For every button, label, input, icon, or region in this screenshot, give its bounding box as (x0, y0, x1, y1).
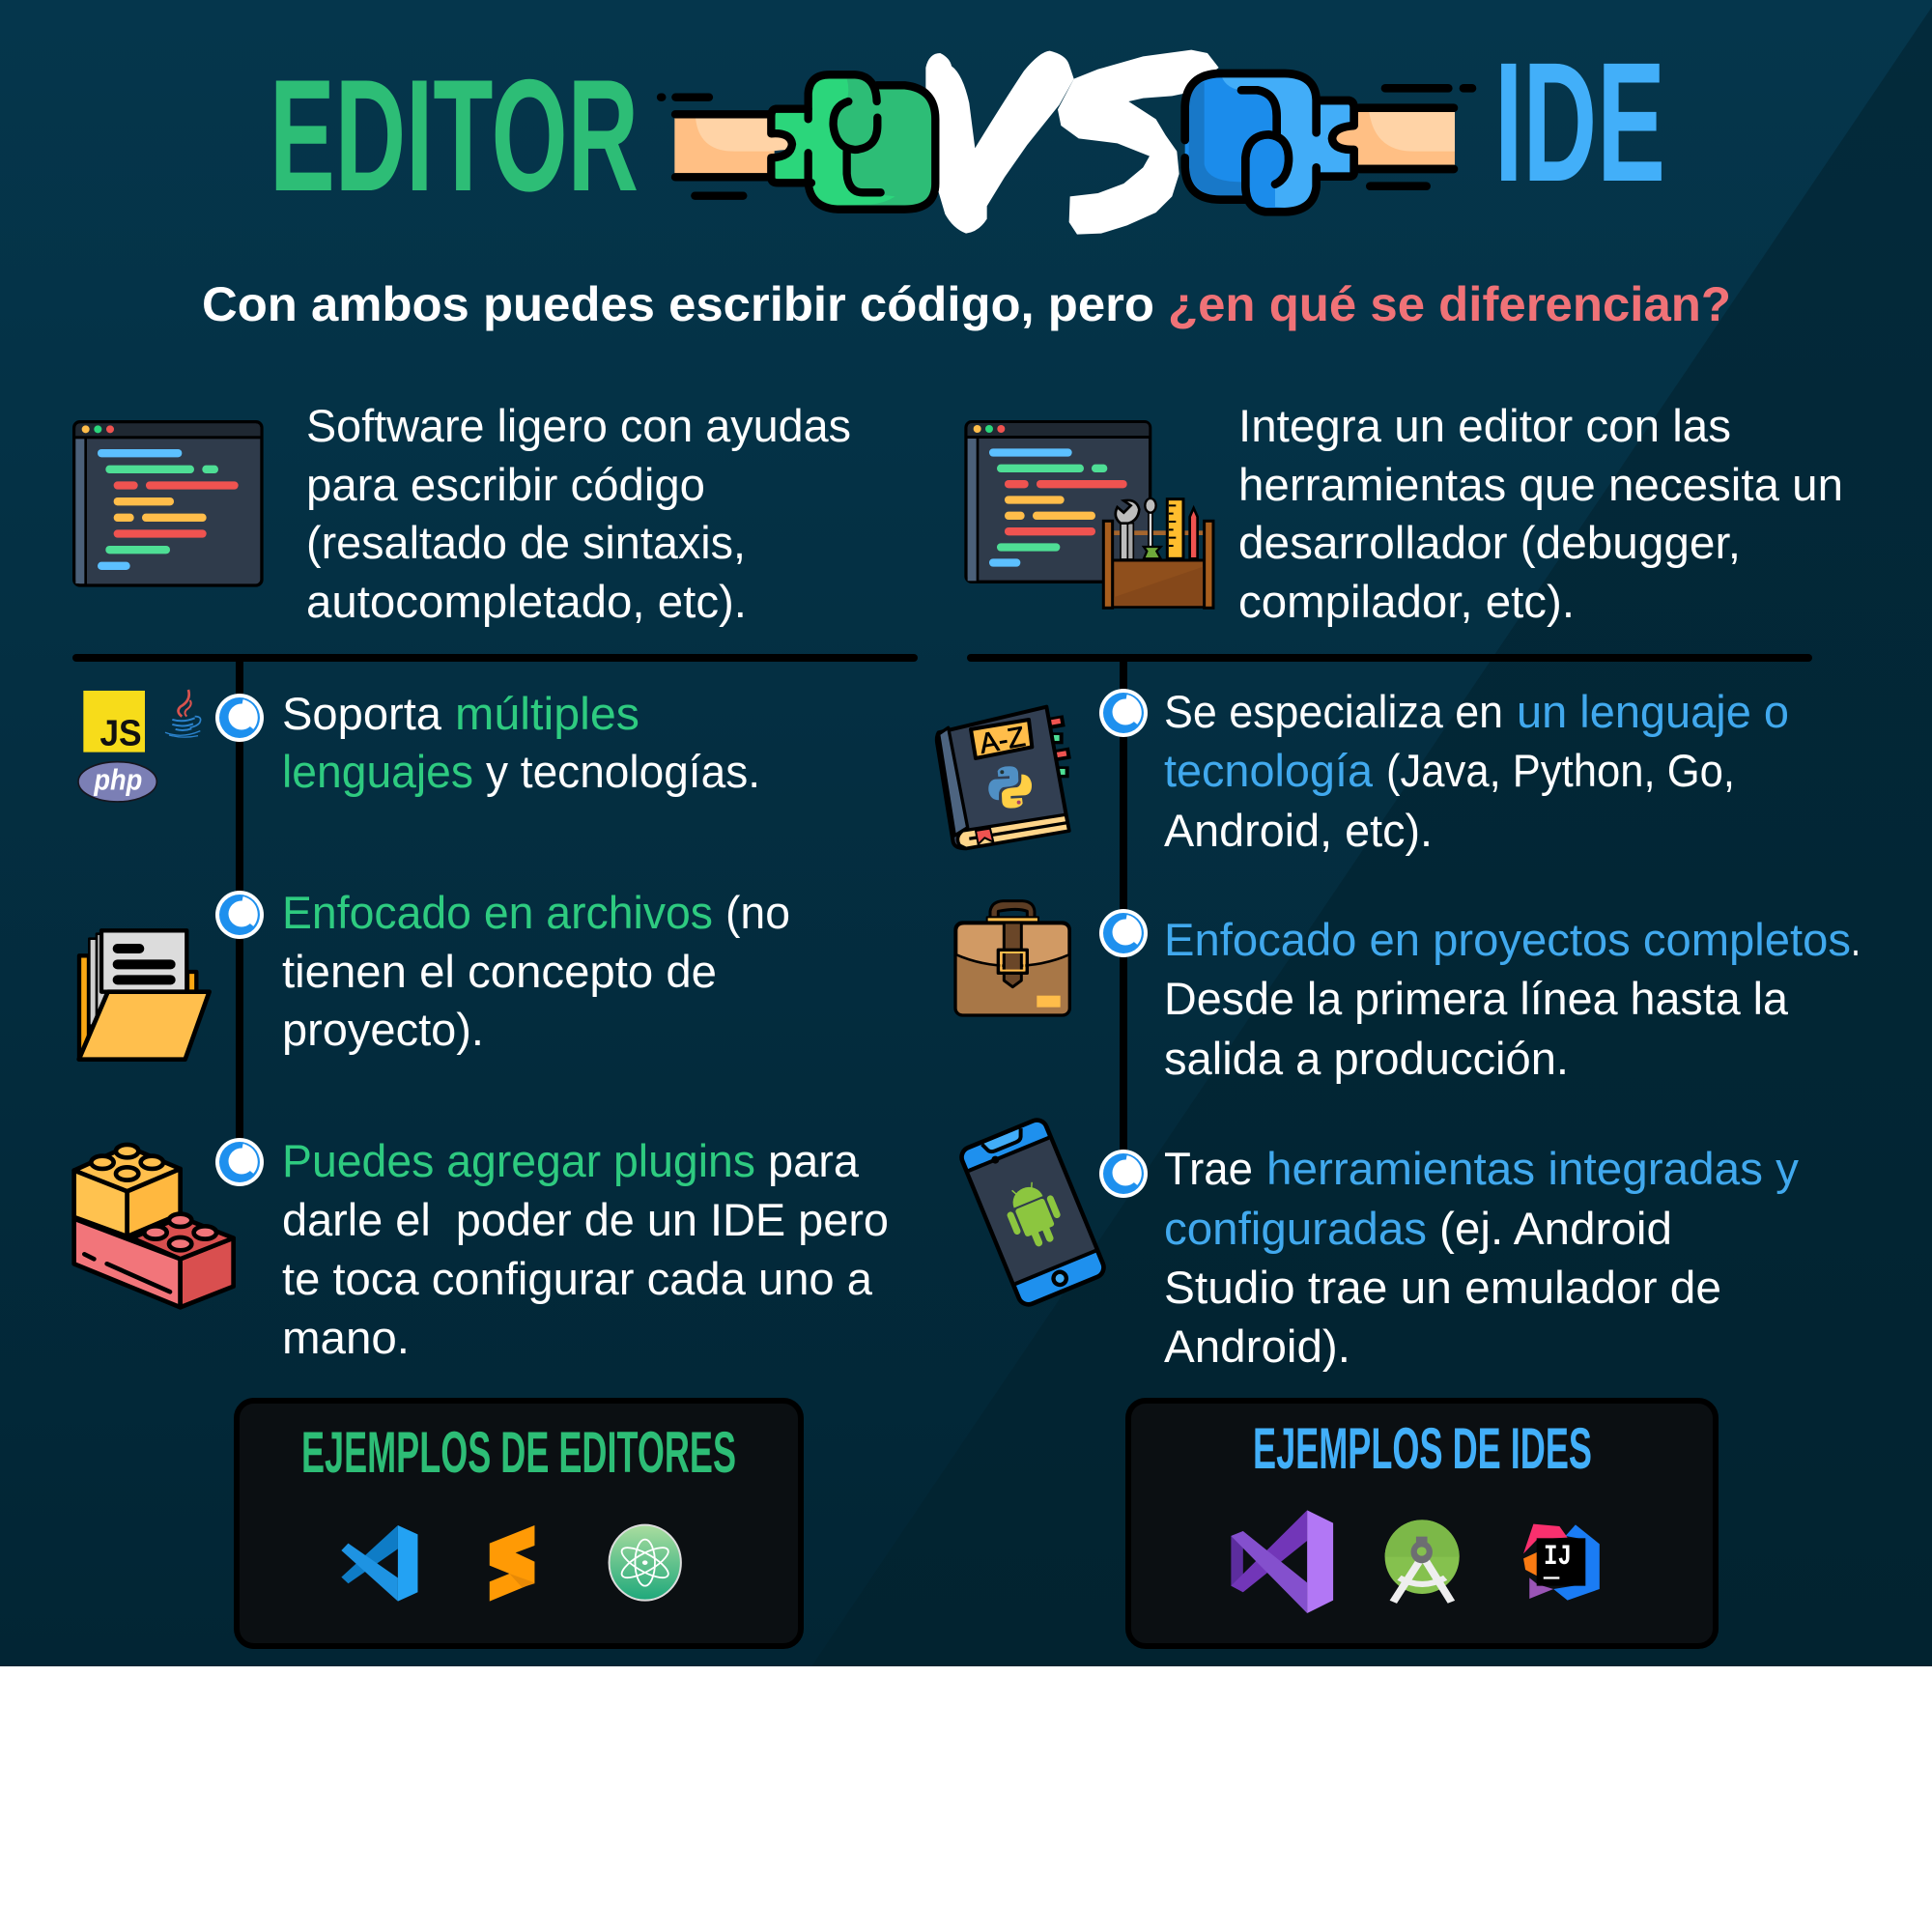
text: bullet 3 editor (282, 1135, 889, 1363)
text: bullet 2 IDE (1164, 914, 1861, 1084)
icon: Atom (610, 1525, 681, 1601)
icon: blue boxing glove fist (1185, 73, 1472, 212)
text: bullet 1 editor: Soporta (282, 688, 442, 739)
text: IDE description: Integra un editor con las (1238, 400, 1731, 451)
icon: android phone (958, 1117, 1107, 1308)
text: editor description: (resaltado de sintaxis, (306, 517, 746, 568)
text: bullet 3 editor: darle el poder de un IDE pero (282, 1194, 889, 1245)
text: bullet 1 editor (282, 688, 760, 797)
text: bullet 3 IDE: Android). (1164, 1321, 1350, 1372)
icon: timeline marker (215, 694, 264, 742)
icon: PHP: php (93, 763, 142, 796)
text: bullet 1 IDE: (Java, Python, Go, (1386, 745, 1735, 796)
text: editor description: autocompletado, etc). (306, 576, 747, 627)
icon: IntelliJ IDEA (1523, 1524, 1600, 1601)
text: editor description (306, 400, 851, 627)
text: bullet 3 editor: Puedes agregar plugins (282, 1135, 755, 1186)
text: bullet 1 IDE: un lenguaje o (1517, 686, 1789, 737)
icon: Visual Studio (1231, 1510, 1333, 1613)
text: bullet 3 IDE (1164, 1143, 1799, 1372)
icon: briefcase (955, 901, 1069, 1015)
icon: timeline marker (215, 891, 264, 939)
text: bullet 3 IDE: Studio trae un emulador de (1164, 1262, 1721, 1313)
text: bullet 2 editor: Enfocado en archivos (282, 887, 713, 938)
text: bullet 2 IDE: salida a producción. (1164, 1033, 1569, 1084)
icon: timeline marker (1099, 689, 1148, 737)
icon: Android Studio (1385, 1520, 1460, 1602)
heading: IDE examples: EJEMPLOS DE IDES (1253, 1416, 1592, 1481)
icon: Java (165, 690, 201, 737)
text: bullet 2 IDE: Enfocado en proyectos completos (1164, 914, 1851, 965)
icon: IDE code window with toolbox (966, 422, 1213, 608)
text: bullet 2 editor: (no (725, 887, 790, 938)
text: bullet 2 IDE: . (1851, 914, 1861, 965)
text: bullet 2 editor: tienen el concepto de (282, 946, 717, 997)
icon: green boxing glove fist (661, 74, 935, 210)
text: editor description: Software ligero con ayudas (306, 400, 851, 451)
text: bullet 3 IDE: configuradas (1164, 1203, 1427, 1254)
icon: A-Z python book: A-Z (977, 721, 1028, 760)
title: VS brush lettering (925, 50, 1219, 235)
text: bullet 2 editor (282, 887, 790, 1055)
text: bullet 1 IDE: Se especializa en (1164, 686, 1503, 737)
title: EDITOR: EDITOR (270, 46, 639, 224)
panel: editor examples (237, 1401, 801, 1646)
timeline: editor (72, 654, 918, 1162)
subtitle (202, 277, 1731, 331)
subtitle: Con ambos puedes escribir código, pero (202, 277, 1154, 331)
text: bullet 3 IDE: (ej. Android (1439, 1203, 1672, 1254)
text: bullet 3 editor: mano. (282, 1312, 410, 1363)
icon: folder with files (79, 930, 210, 1060)
icon: timeline marker (1099, 909, 1148, 957)
text: bullet 3 editor: para (768, 1135, 860, 1186)
icon: lego bricks (74, 1145, 234, 1307)
title: IDE: IDE (1494, 28, 1665, 217)
subtitle: ¿en qué se diferencian? (1168, 277, 1731, 331)
icon: Sublime Text (490, 1525, 534, 1602)
text: bullet 1 IDE: Android, etc). (1164, 805, 1433, 856)
text: bullet 3 IDE: herramientas integradas y (1266, 1143, 1799, 1194)
text: bullet 2 IDE: Desde la primera línea hasta la (1164, 973, 1789, 1024)
icon: JS, Java and PHP logos (78, 690, 201, 802)
text: bullet 1 editor: múltiples (455, 688, 639, 739)
heading: editor examples: EJEMPLOS DE EDITORES (301, 1420, 736, 1485)
icon: timeline marker (1099, 1150, 1148, 1198)
text: bullet 1 IDE (1164, 686, 1789, 856)
icon: editor code window (74, 422, 262, 585)
icon: A-Z python book (937, 707, 1071, 848)
icon: timeline marker (215, 1138, 264, 1186)
toolbox (1103, 498, 1213, 608)
text: IDE description: herramientas que necesita un (1238, 459, 1843, 510)
text: bullet 2 editor: proyecto). (282, 1004, 484, 1055)
panel: IDE examples (1128, 1401, 1716, 1646)
text: IDE description: desarrollador (debugger, (1238, 517, 1741, 568)
icon: JS: JS (99, 714, 142, 754)
text: bullet 3 IDE: Trae (1164, 1143, 1253, 1194)
text: bullet 1 editor: y tecnologías. (486, 746, 760, 797)
icon: VS Code (341, 1525, 417, 1602)
text: editor description: para escribir código (306, 459, 705, 510)
text: IDE description (1238, 400, 1843, 627)
text: bullet 3 editor: te toca configurar cada uno a (282, 1253, 873, 1304)
text: bullet 1 editor: lenguajes (282, 746, 473, 797)
text: IDE description: compilador, etc). (1238, 576, 1575, 627)
text: bullet 1 IDE: tecnología (1164, 745, 1374, 796)
timeline: IDE (967, 654, 1812, 1174)
icon: IntelliJ IDEA: IJ (1544, 1541, 1572, 1574)
